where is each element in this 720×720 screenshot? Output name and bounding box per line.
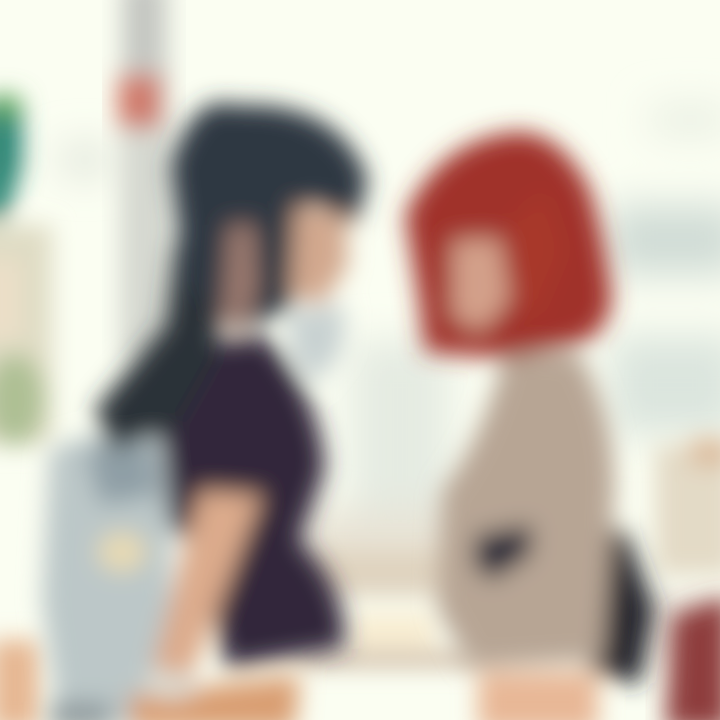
hand dark [474, 525, 532, 580]
figure left: dark-haired person [42, 102, 368, 720]
skirt and legs backdrop [42, 434, 170, 720]
hair [405, 132, 612, 358]
pole with red band [118, 0, 170, 360]
lower right red object [665, 595, 720, 720]
face skin [290, 205, 348, 305]
right background furniture [650, 438, 720, 660]
body dress [160, 335, 345, 668]
sweater [438, 352, 614, 668]
face skin [452, 238, 510, 332]
arm [152, 490, 262, 680]
bag [590, 530, 655, 685]
hair on head [170, 102, 368, 330]
ponytail hair [95, 240, 230, 450]
collar [288, 305, 345, 385]
background: window scenery [60, 105, 720, 570]
figure right: red-haired person [405, 132, 655, 720]
left plant and shelf [0, 94, 52, 446]
table and floor [0, 548, 480, 720]
legs [478, 672, 598, 720]
